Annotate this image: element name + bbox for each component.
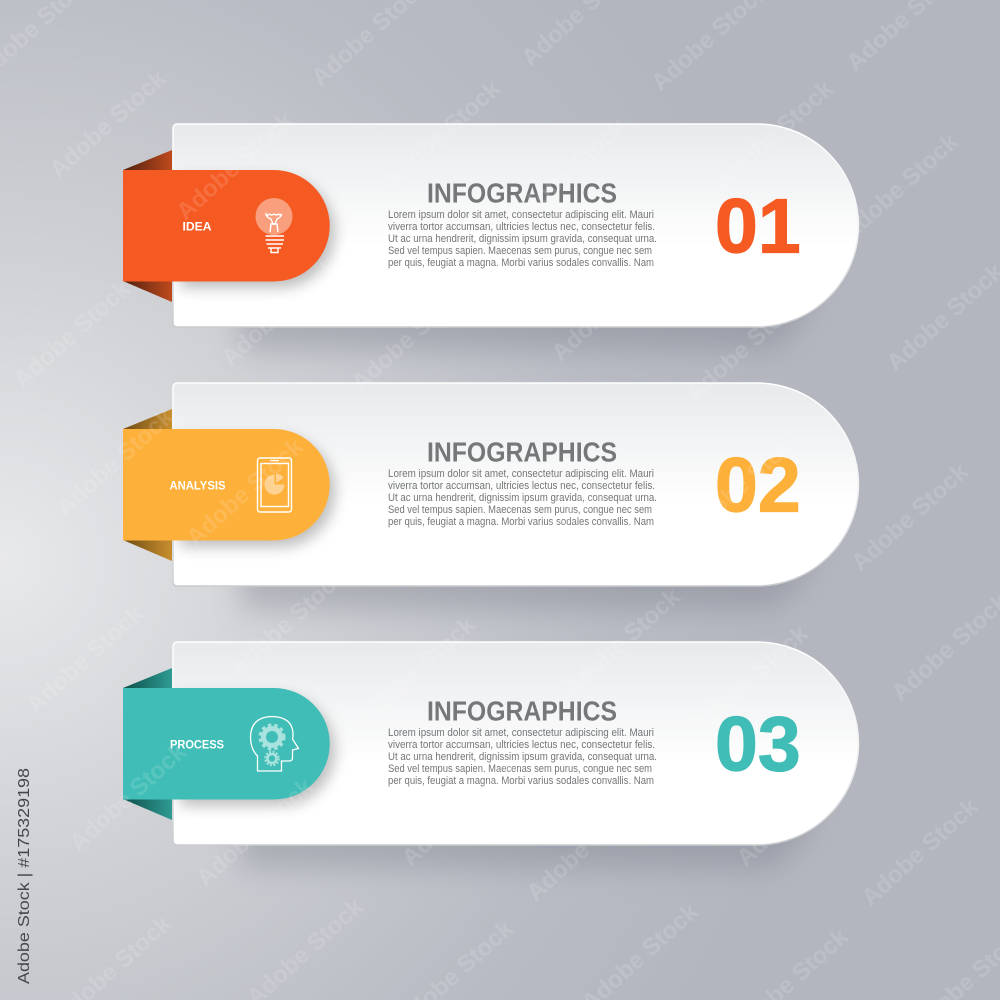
- panel 3 tab: [123, 688, 330, 800]
- watermark pattern: Adobe Stock: [51, 403, 179, 522]
- icon: light bulb: [256, 198, 292, 252]
- panel 3 body text: viverra tortor accumsan, ultricies lectus nec, consectetur felis.: [388, 739, 655, 751]
- watermark pattern: Adobe Stock: [224, 563, 352, 682]
- watermark pattern: Adobe Stock: [681, 423, 809, 542]
- panel 1 card: [173, 124, 858, 327]
- panel 2 body text: Ut ac urna hendrerit, dignissim ipsum gravida, consequat urna.: [388, 492, 657, 504]
- panel 1 body text: Sed vel tempus sapien. Maecenas sem purus, congue nec sem: [388, 245, 652, 257]
- watermark pattern: Adobe Stock: [171, 107, 299, 226]
- panel 2 label: ANALYSIS: [170, 478, 226, 492]
- panel 1: idea: [123, 124, 858, 350]
- panel 3 body text: Lorem ipsum dolor sit amet, consectetur adipiscing elit. Mauri: [388, 727, 654, 739]
- stock id caption: Adobe Stock | #175329198: [16, 768, 33, 984]
- watermark pattern: Adobe Stock: [856, 793, 984, 912]
- watermark pattern: Adobe Stock: [21, 600, 149, 719]
- panel 2 tab shadow: [180, 437, 335, 547]
- watermark pattern: Adobe Stock: [64, 738, 192, 857]
- panel 2 title: INFOGRAPHICS: [427, 436, 617, 468]
- panel 1 body text: Ut ac urna hendrerit, dignissim ipsum gravida, consequat urna.: [388, 233, 657, 245]
- watermark pattern: Adobe Stock: [504, 113, 632, 232]
- panel 1 top fold: [123, 150, 172, 170]
- watermark pattern: Adobe Stock: [396, 753, 524, 872]
- panel 2 card: [173, 383, 858, 586]
- panel 2 body text: Lorem ipsum dolor sit amet, consectetur adipiscing elit. Mauri: [388, 468, 654, 480]
- panel 3 top fold: [123, 668, 172, 688]
- panel 2 body text: [388, 468, 657, 528]
- panel 2 number: 02: [715, 442, 801, 528]
- panel 3 body text: Ut ac urna hendrerit, dignissim ipsum gravida, consequat urna.: [388, 751, 657, 763]
- panel 2 body text: viverra tortor accumsan, ultricies lectus nec, consectetur felis.: [388, 480, 655, 492]
- watermark pattern: Adobe Stock: [558, 583, 686, 702]
- panel 1 body text: [388, 209, 657, 269]
- panel 1 number: 01: [715, 184, 801, 270]
- panel 2: analysis: [123, 383, 858, 609]
- watermark pattern: Adobe Stock: [44, 65, 172, 184]
- panel 3 body text: [388, 727, 657, 787]
- panel 3 body text: Sed vel tempus sapien. Maecenas sem purus, congue nec sem: [388, 763, 652, 775]
- panel 2 tab: [123, 429, 330, 540]
- icon: head with gears: [250, 716, 298, 771]
- watermark pattern: Adobe Stock: [216, 253, 344, 372]
- watermark pattern: Adobe Stock: [846, 458, 974, 577]
- watermark pattern: Adobe Stock: [511, 453, 639, 572]
- watermark pattern: Adobe Stock: [521, 788, 649, 907]
- panel 2 top fold: [123, 409, 172, 429]
- panel 2 bottom fold: [123, 540, 172, 561]
- panel 3 tab shadow: [180, 696, 335, 806]
- watermark pattern: Adobe Stock: [686, 620, 814, 739]
- panel 3 title: INFOGRAPHICS: [427, 696, 617, 726]
- panel 1 card shadow: [240, 190, 817, 350]
- watermark pattern: Adobe Stock: [181, 433, 309, 552]
- watermark pattern: Adobe Stock: [711, 75, 839, 194]
- panel 3: process: [123, 642, 858, 868]
- watermark pattern: Adobe Stock: [681, 288, 809, 407]
- panel 1 tab shadow: [180, 178, 335, 288]
- panel 3 card shadow: [240, 708, 817, 868]
- panel 1 label: IDEA: [182, 220, 212, 234]
- panel 2 body text: Sed vel tempus sapien. Maecenas sem purus, congue nec sem: [388, 504, 652, 516]
- watermark pattern: Adobe Stock: [731, 753, 859, 872]
- watermark pattern: Adobe Stock: [191, 773, 319, 892]
- panel 1 bottom fold: [123, 281, 172, 302]
- watermark pattern: Adobe Stock: [546, 248, 674, 367]
- panel 1 body text: per quis, feugiat a magna. Morbi varius sodales convallis. Nam: [388, 257, 654, 269]
- panel 3 body text: per quis, feugiat a magna. Morbi varius sodales convallis. Nam: [388, 775, 654, 787]
- icon: tablet with pie chart: [258, 458, 292, 512]
- watermark pattern: Adobe Stock: [8, 275, 136, 394]
- panel 1 title: INFOGRAPHICS: [427, 178, 617, 208]
- watermark pattern: Adobe Stock: [353, 611, 481, 730]
- watermark pattern: Adobe Stock: [378, 75, 506, 194]
- watermark pattern: Adobe Stock: [836, 128, 964, 247]
- panel 1 body text: viverra tortor accumsan, ultricies lectus nec, consectetur felis.: [388, 221, 655, 233]
- panel 1 body text: Lorem ipsum dolor sit amet, consectetur adipiscing elit. Mauri: [388, 209, 654, 221]
- panel 2 card shadow: [240, 449, 817, 609]
- panel 3 number: 03: [715, 702, 801, 788]
- panel 3 bottom fold: [123, 799, 172, 820]
- panel 1 tab: [123, 170, 330, 282]
- panel 3 card: [173, 642, 858, 845]
- panel 3 label: PROCESS: [170, 738, 224, 752]
- watermark pattern: Adobe Stock: [346, 278, 474, 397]
- panel 2 body text: per quis, feugiat a magna. Morbi varius sodales convallis. Nam: [388, 516, 654, 528]
